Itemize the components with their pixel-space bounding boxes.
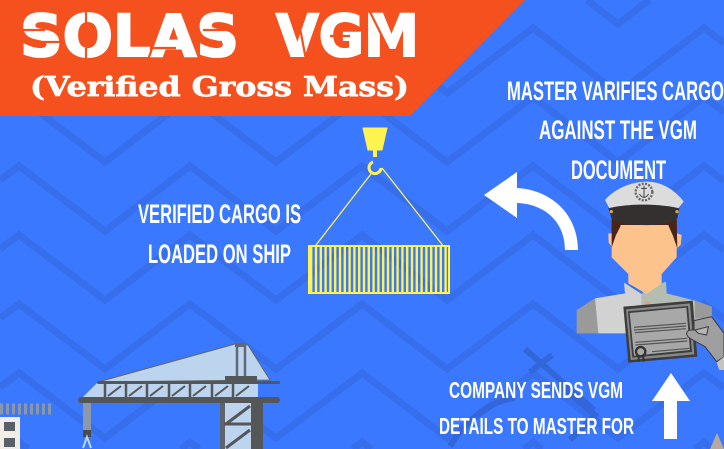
text: verified cargo (138, 199, 301, 269)
shoulders (577, 298, 598, 333)
subtitle: (Verified Gross Mass) (30, 72, 409, 103)
title: SOLAS VGM: VGM (276, 2, 419, 70)
text: company sends (439, 377, 634, 439)
hand (687, 317, 724, 362)
text: verified cargo: LOADED ON SHIP (148, 239, 291, 269)
icon: port crane (78, 343, 280, 449)
title: SOLAS VGM: SOLAS (20, 2, 239, 70)
certificate (623, 301, 697, 363)
hair (612, 213, 677, 247)
text: master verifies (507, 76, 724, 185)
title banner (0, 0, 525, 116)
text: verified cargo: VERIFIED CARGO IS (138, 199, 301, 229)
icon: ship master with certificate (577, 182, 724, 370)
arrow: curved left (484, 172, 578, 250)
text: master verifies: DOCUMENT (571, 155, 666, 185)
cap (605, 182, 684, 209)
faint background anchor (450, 349, 595, 446)
text: company sends: COMPANY SENDS VGM (449, 377, 623, 403)
title: SOLAS VGM (20, 2, 419, 70)
face (608, 225, 682, 294)
icon: distant ship mast (710, 433, 724, 449)
icon: container on crane hook (309, 128, 449, 293)
icon: building (0, 409, 52, 449)
arrow: up (652, 373, 690, 439)
